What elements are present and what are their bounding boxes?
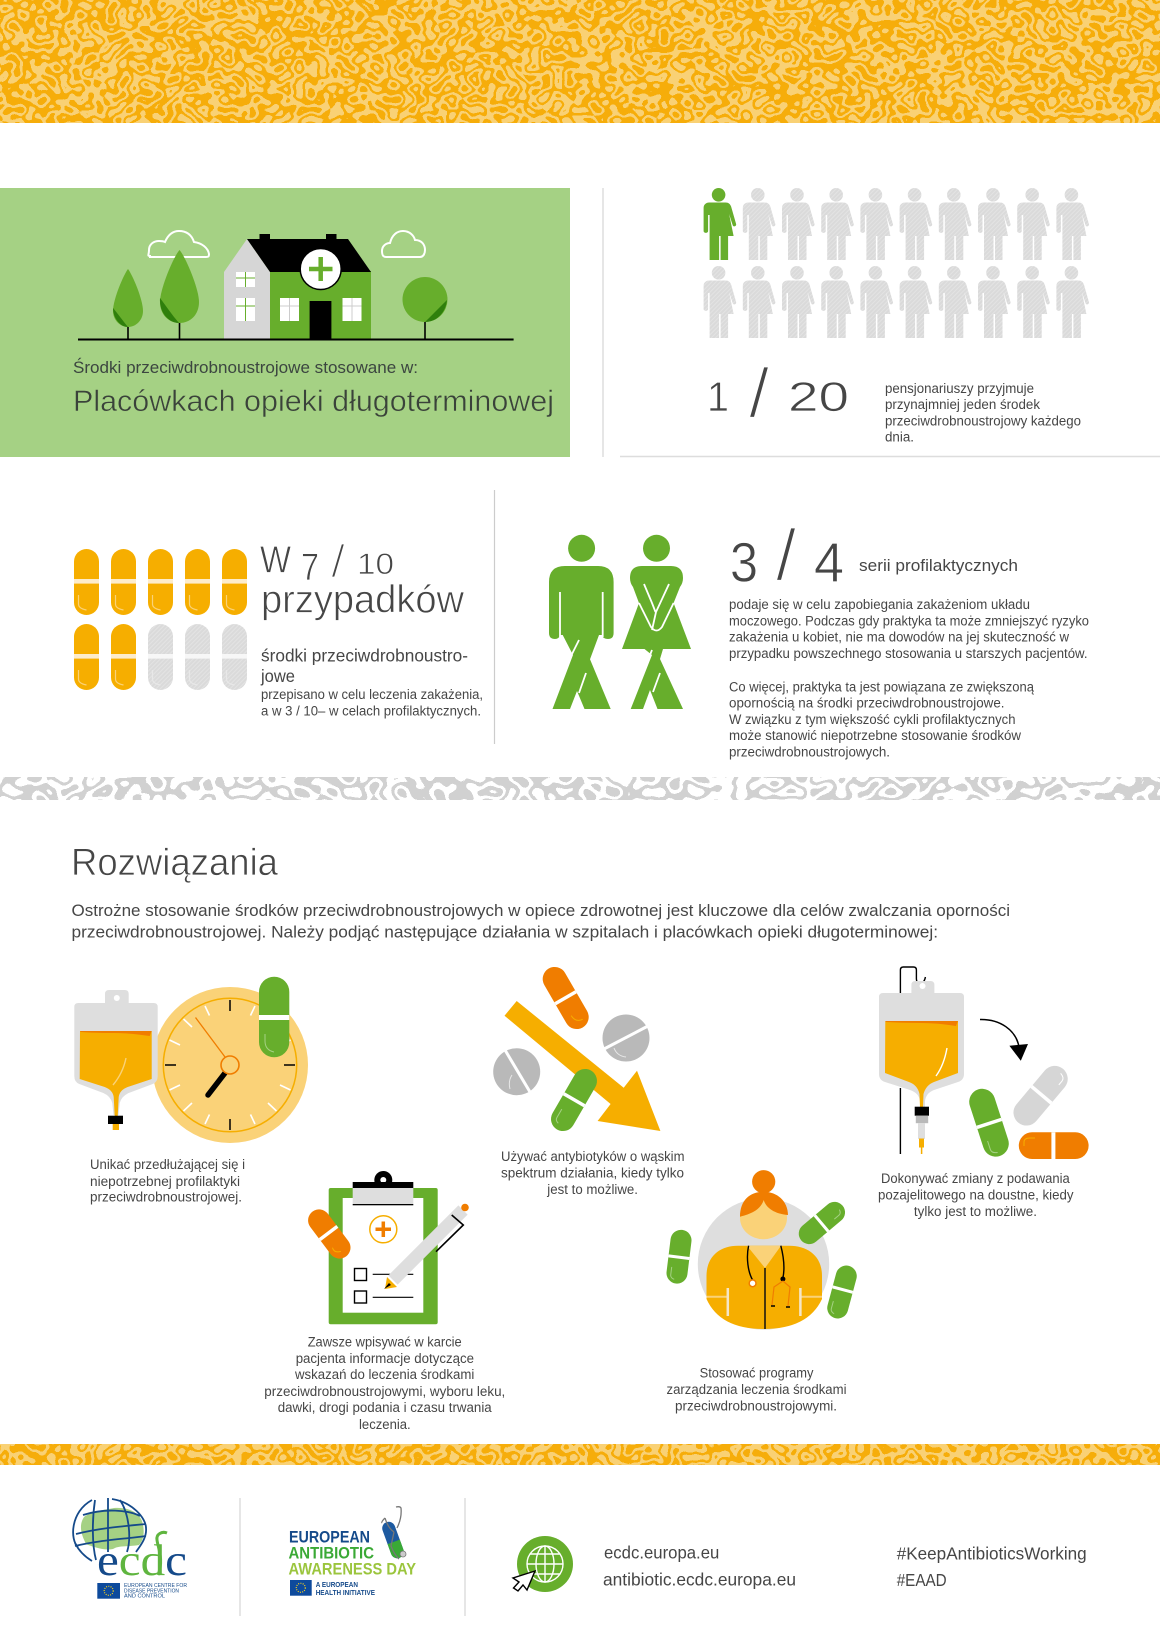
statistic: 3 / 4: / xyxy=(776,516,796,596)
caption: spektrum działania, kiedy tylko xyxy=(501,1166,684,1181)
hashtags: #EAAD xyxy=(897,1570,947,1590)
statistic: 1 / 20: 20 xyxy=(788,373,849,420)
icon: narrow spectrum arrow with pills xyxy=(493,963,660,1135)
hashtags xyxy=(897,1543,1087,1590)
section introduction xyxy=(72,901,1010,941)
logo: European Antibiotic Awareness Day: HEALTH INITIATIVE xyxy=(316,1588,375,1597)
text block: prophylaxis explanation: przypadku powszechnego stosowania u starszych pacjentów. xyxy=(729,646,1088,661)
icon: oral capsules xyxy=(966,1061,1089,1160)
statistic description: przeciwdrobnoustrojowy każdego xyxy=(885,414,1081,428)
text block: prophylaxis explanation: podaje się w celu zapobiegania zakażeniom układu xyxy=(729,597,1030,612)
caption xyxy=(501,1149,684,1197)
panel: long-term care facility header xyxy=(0,188,570,457)
statistic description: środki przeciwdrobnoustro- xyxy=(261,646,468,666)
website links: ecdc.europa.eu xyxy=(604,1542,719,1562)
statistic description xyxy=(260,646,483,719)
icon: clipboard with capsule and pen xyxy=(304,1171,469,1324)
caption: leczenia. xyxy=(359,1417,411,1432)
website links: antibiotic.ecdc.europa.eu xyxy=(603,1570,796,1590)
logo: European Antibiotic Awareness Day: A EUROPEAN xyxy=(316,1580,358,1589)
statistic heading: W 7 / 10 przypadków: / xyxy=(331,535,345,587)
statistic heading: W 7 / 10 przypadków: 7 xyxy=(301,547,319,589)
statistic description: przepisano w celu leczenia zakażenia, xyxy=(261,687,483,702)
statistic: 3 / 4: 4 xyxy=(814,531,844,594)
caption: pozajelitowego na doustne, kiedy xyxy=(878,1188,1074,1202)
caption: dawki, drogi podania i czasu trwania xyxy=(278,1400,492,1415)
statistic description xyxy=(885,381,1081,444)
statistic description: pensjonariuszy przyjmuje xyxy=(885,381,1034,396)
caption: Stosować programy xyxy=(700,1366,814,1381)
statistic label: serii profilaktycznych xyxy=(859,556,1018,575)
statistic description: dnia. xyxy=(885,430,914,444)
statistic: 1 / 20 xyxy=(707,354,849,432)
section heading: Rozwiązania xyxy=(71,842,279,884)
section introduction: przeciwdrobnoustrojowej. Należy podjąć następujące działania w szpitalach i placówkach opieki długoterminowej: xyxy=(72,922,938,941)
caption: przeciwdrobnoustrojowymi. xyxy=(675,1399,837,1414)
caption: wskazań do leczenia środkami xyxy=(294,1367,474,1382)
statistic description: przynajmniej jeden środek xyxy=(885,397,1040,412)
arrow: switch to oral xyxy=(980,1019,1028,1061)
caption: tylko jest to możliwe. xyxy=(914,1204,1037,1219)
statistic description: a w 3 / 10– w celach profilaktycznych. xyxy=(261,704,481,719)
statistic: 3 / 4: 3 xyxy=(730,531,758,594)
caption: pacjenta informacje dotyczące xyxy=(296,1351,474,1366)
logo: European Antibiotic Awareness Day xyxy=(288,1507,417,1597)
panel subtitle: Środki przeciwdrobnoustrojowe stosowane w: xyxy=(73,358,418,377)
statistic heading: W 7 / 10 przypadków: przypadków xyxy=(261,579,464,622)
caption: Używać antybiotyków o wąskim xyxy=(501,1149,684,1164)
divider rules xyxy=(240,1498,465,1616)
pictogram: 1 in 20 residents xyxy=(704,188,1089,338)
statistic description: jowe xyxy=(260,666,295,686)
statistic heading: W 7 / 10 przypadków xyxy=(260,535,464,622)
icon: doctor with capsules xyxy=(665,1170,859,1330)
statistic: 1 / 20: 1 xyxy=(707,373,729,420)
icon: green capsule on clock xyxy=(259,977,289,1057)
section introduction: Ostrożne stosowanie środków przeciwdrobnoustrojowych w opiece zdrowotnej jest kluczowe dla celów zwalczania oporności xyxy=(72,901,1010,920)
icon: globe with cursor xyxy=(513,1536,573,1592)
grey patterned band xyxy=(0,777,1160,800)
text block: prophylaxis explanation: może stanowić niepotrzebne stosowanie środków xyxy=(729,728,1021,743)
icon: infusion bag xyxy=(74,990,158,1130)
caption xyxy=(878,1171,1074,1219)
caption xyxy=(90,1157,245,1205)
text block: prophylaxis explanation: opornością na środki przeciwdrobnoustrojowe. xyxy=(729,696,1004,710)
caption: Dokonywać zmiany z podawania xyxy=(881,1171,1070,1186)
text block: prophylaxis explanation: moczowego. Podczas gdy praktyka ta może zmniejszyć ryzyko xyxy=(729,614,1089,628)
text block: prophylaxis explanation: przeciwdrobnoustrojowych. xyxy=(729,744,890,760)
logo: European Antibiotic Awareness Day: EUROPEAN xyxy=(289,1528,370,1547)
bottom patterned band xyxy=(0,1444,1160,1465)
logo: ECDC xyxy=(73,1498,187,1600)
statistic: 3 / 4 xyxy=(730,516,844,596)
caption xyxy=(264,1335,505,1432)
icon: man and woman with crossed legs xyxy=(549,535,691,709)
caption: niepotrzebnej profilaktyki xyxy=(90,1174,240,1189)
divider rule xyxy=(494,490,496,744)
logo: ECDC: AND CONTROL xyxy=(124,1594,165,1600)
logo: European Antibiotic Awareness Day: ANTIBIOTIC xyxy=(288,1543,374,1562)
divider rules xyxy=(603,188,1160,457)
caption: przeciwdrobnoustrojowej. xyxy=(90,1190,242,1205)
icon: infusion bag on stand with oral capsules xyxy=(879,967,964,1154)
panel title: Placówkach opieki długoterminowej xyxy=(73,385,554,418)
illustration: care home with trees xyxy=(78,231,514,340)
website links xyxy=(603,1542,796,1590)
logo: European Antibiotic Awareness Day: AWARENESS DAY xyxy=(288,1559,417,1578)
statistic: 1 / 20: / xyxy=(749,354,770,432)
text block: prophylaxis explanation: zakażenia u kobiet, nie ma dowodów na jej skuteczność w xyxy=(729,630,1069,645)
caption: Zawsze wpisywać w karcie xyxy=(308,1335,462,1350)
logo: ECDC: EUROPEAN CENTRE FOR xyxy=(124,1583,187,1589)
statistic heading: W 7 / 10 przypadków: W xyxy=(260,540,291,582)
caption: przeciwdrobnoustrojowymi, wyboru leku, xyxy=(264,1384,505,1399)
text block: prophylaxis explanation xyxy=(729,597,1089,760)
logo: ECDC: ecdc xyxy=(97,1536,187,1585)
logo: ECDC: DISEASE PREVENTION xyxy=(124,1588,179,1594)
caption xyxy=(666,1366,846,1414)
statistic heading: W 7 / 10 przypadków: 10 xyxy=(357,548,394,581)
pictogram: 7 of 10 capsules xyxy=(74,549,247,690)
caption: zarządzania leczenia środkami xyxy=(666,1382,846,1397)
text block: prophylaxis explanation: Co więcej, praktyka ta jest powiązana ze zwiększoną xyxy=(729,680,1034,694)
top patterned band xyxy=(0,0,1160,123)
caption: jest to możliwe. xyxy=(546,1182,638,1197)
hashtags: #KeepAntibioticsWorking xyxy=(897,1543,1087,1563)
icon: clock xyxy=(152,987,308,1143)
caption: Unikać przedłużającej się i xyxy=(90,1157,245,1172)
text block: prophylaxis explanation: W związku z tym większość cykli profilaktycznych xyxy=(729,712,1016,727)
